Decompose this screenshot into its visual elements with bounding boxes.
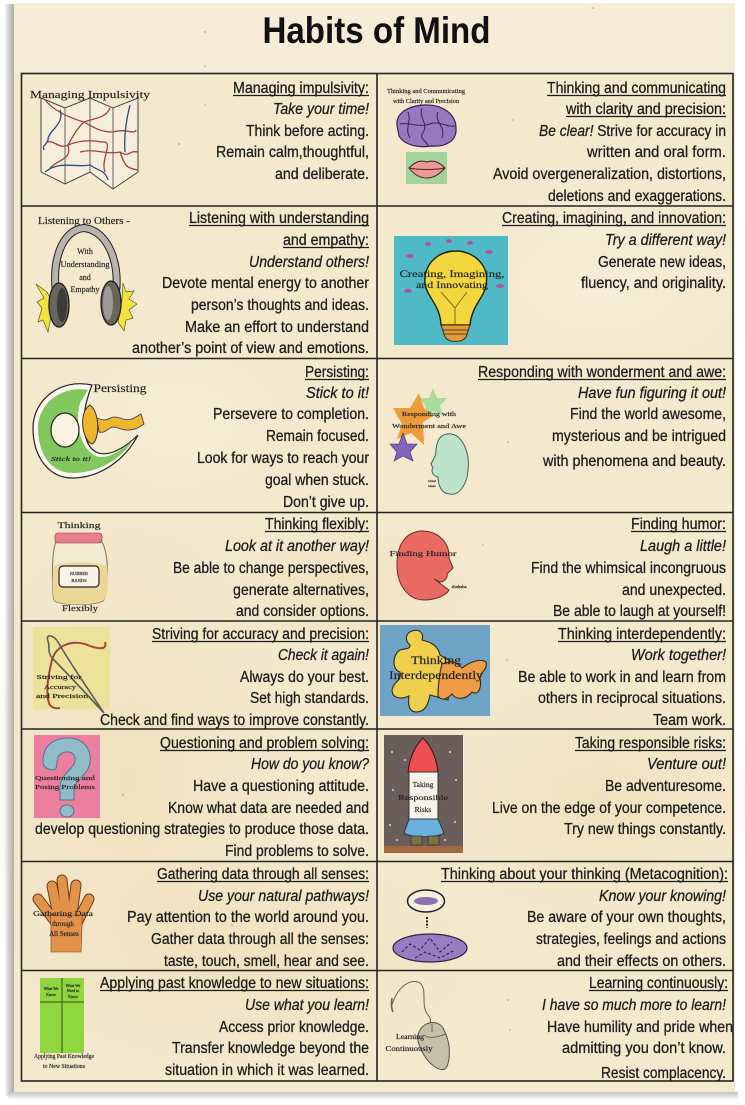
panel: questioning and problem solving bbox=[34, 735, 369, 860]
panel: learning continuously bbox=[386, 975, 733, 1082]
text block: striving for accuracy: Always do your best. bbox=[240, 669, 369, 686]
panel: gathering data through senses bbox=[33, 866, 369, 970]
panel: thinking interdependently bbox=[380, 625, 726, 729]
icon: rocket: Responsible bbox=[398, 793, 449, 802]
text block: thinking flexibly: Be able to change perspectives, bbox=[173, 560, 369, 577]
text block: thinking flexibly: generate alternatives, bbox=[233, 582, 369, 599]
icon: computer mouse bbox=[386, 981, 449, 1070]
text block: questioning and problem solving: Know what data are needed and bbox=[168, 800, 369, 817]
icon: light bulb: Creating, Imagining, bbox=[400, 270, 504, 280]
text block: learning continuously bbox=[542, 975, 733, 1082]
icon: hand: All Senses bbox=[49, 930, 79, 938]
icon: brain and lips: Thinking and Communicating bbox=[387, 88, 466, 95]
icon: hand bbox=[33, 880, 94, 952]
icon: laughing head: ahahaha bbox=[452, 584, 466, 589]
panel: applying past knowledge bbox=[34, 975, 369, 1079]
panel: striving for accuracy bbox=[33, 626, 369, 729]
icon: tape dispenser bbox=[33, 383, 147, 478]
heading: Finding humor: bbox=[631, 516, 726, 533]
heading: Learning continuously: bbox=[589, 975, 728, 992]
heading bbox=[547, 80, 726, 118]
text block: metacognition: and their effects on others. bbox=[557, 953, 726, 970]
text block: listening with understanding: Understand others! bbox=[249, 254, 369, 271]
icon: green T chart: Know bbox=[68, 994, 78, 999]
text block: learning continuously: admitting you don’t know. bbox=[562, 1040, 726, 1057]
text block: responding with wonderment: with phenomena and beauty. bbox=[542, 453, 726, 470]
text block: gathering data through senses: taste, touch, smell, hear and see. bbox=[164, 953, 369, 970]
icon: headphones: Empathy bbox=[71, 285, 99, 294]
text block: questioning and problem solving: How do you know? bbox=[251, 756, 369, 773]
heading: Thinking and communicating bbox=[547, 80, 726, 97]
icon: hand: through bbox=[52, 920, 74, 928]
icon: stars and face bbox=[390, 388, 468, 494]
text block: persisting: Stick to it! bbox=[306, 385, 369, 402]
text block: taking responsible risks bbox=[492, 735, 727, 838]
text block: applying past knowledge bbox=[100, 975, 369, 1079]
text block: thinking interdependently: Team work. bbox=[653, 712, 726, 729]
text block: listening with understanding: Devote mental energy to another bbox=[162, 275, 370, 292]
icon: stars and face: Wonderment and Awe bbox=[392, 423, 466, 430]
text block: thinking and communicating bbox=[493, 80, 726, 205]
text block: managing impulsivity: Remain calm,thoughtful, bbox=[216, 144, 369, 161]
icon: rocket bbox=[384, 735, 463, 853]
heading: Persisting: bbox=[305, 364, 369, 381]
text block: listening with understanding: another’s point of view and emotions. bbox=[132, 340, 369, 357]
text block: applying past knowledge: Access prior knowledge. bbox=[219, 1019, 369, 1036]
icon: light bulb: and Innovating bbox=[416, 281, 488, 291]
text block: thinking flexibly: Look at it another way! bbox=[225, 538, 369, 555]
icon: brain and lips: with Clarity and Precision bbox=[393, 98, 460, 105]
text block: striving for accuracy: Check it again! bbox=[278, 647, 369, 664]
text block: managing impulsivity: and deliberate. bbox=[275, 166, 369, 183]
heading: Striving for accuracy and precision: bbox=[152, 626, 369, 643]
icon: green T chart bbox=[34, 978, 94, 1070]
text block: managing impulsivity: Take your time! bbox=[273, 101, 369, 118]
icon: green T chart: What We bbox=[44, 986, 59, 991]
icon: needle and thread: and Precision bbox=[36, 694, 88, 700]
heading: Applying past knowledge to new situations: bbox=[100, 975, 369, 992]
text block: thinking and communicating: Be clear! Strive for accuracy in bbox=[539, 123, 726, 140]
text block: persisting: Remain focused. bbox=[266, 428, 369, 445]
icon: rocket: Risks bbox=[415, 805, 431, 814]
text block: questioning and problem solving: Have a questioning attitude. bbox=[193, 778, 369, 795]
icon: laughing head bbox=[390, 531, 466, 600]
icon: headphones: With bbox=[77, 247, 93, 256]
text block: responding with wonderment: mysterious and be intrigued bbox=[552, 428, 726, 445]
icon: rubber band jar: BANDS bbox=[71, 578, 87, 583]
icon: question mark: Questioning and bbox=[35, 775, 96, 782]
icon: stars and face: ideas bbox=[428, 484, 436, 488]
text block: finding humor: Laugh a little! bbox=[640, 538, 726, 555]
text block: gathering data through senses bbox=[127, 866, 369, 970]
text block: responding with wonderment: Find the world awesome, bbox=[570, 406, 726, 423]
icon: rubber band jar bbox=[52, 520, 108, 613]
icon: needle and thread: Accuracy bbox=[44, 685, 76, 691]
icon: thought bubble and brain bbox=[393, 890, 467, 962]
icon: puzzle pieces: Interdependently bbox=[389, 670, 483, 682]
panel: managing impulsivity bbox=[30, 80, 369, 189]
text block: listening with understanding bbox=[132, 210, 370, 357]
text block: responding with wonderment: Have fun figuring it out! bbox=[578, 385, 726, 402]
icon: green T chart: to New Situations bbox=[43, 1063, 85, 1070]
icon: headphones bbox=[36, 216, 137, 332]
heading: Gathering data through all senses: bbox=[157, 866, 369, 883]
icon: stars and face: Responding with bbox=[402, 411, 457, 418]
icon: tape dispenser: Stick to it! bbox=[51, 456, 91, 463]
panel: persisting bbox=[33, 364, 370, 511]
text block: persisting: Don’t give up. bbox=[283, 494, 369, 511]
heading: Questioning and problem solving: bbox=[160, 735, 369, 752]
heading: and empathy: bbox=[283, 232, 369, 249]
text block: applying past knowledge: situation in which it was learned. bbox=[165, 1062, 369, 1079]
text block: questioning and problem solving: Find problems to solve. bbox=[225, 843, 369, 860]
icon: green T chart: Need to bbox=[67, 988, 79, 993]
text block: creating, imagining, innovation: Generate new ideas, bbox=[598, 254, 726, 271]
text block: learning continuously: Resist complacency. bbox=[601, 1065, 726, 1082]
icon: stars and face: Great bbox=[428, 479, 436, 483]
icon: green T chart: Know bbox=[46, 992, 56, 997]
icon: rubber band jar: Thinking bbox=[58, 520, 102, 530]
text block: questioning and problem solving bbox=[35, 735, 369, 860]
text block: taking responsible risks: Venture out! bbox=[647, 756, 727, 773]
text block: creating, imagining, innovation: Try a different way! bbox=[605, 232, 726, 249]
panel: responding with wonderment bbox=[390, 364, 726, 494]
text block: listening with understanding: Make an effort to understand bbox=[185, 319, 369, 336]
heading bbox=[189, 210, 369, 249]
icon: green T chart: What We bbox=[66, 983, 81, 988]
heading: Thinking interdependently: bbox=[558, 626, 726, 643]
text block: managing impulsivity bbox=[216, 80, 369, 183]
text block: thinking flexibly bbox=[173, 516, 369, 620]
text block: finding humor: and unexpected. bbox=[622, 582, 726, 599]
text block: thinking interdependently bbox=[518, 626, 726, 729]
icon: question mark: Posing Problems bbox=[35, 784, 96, 791]
icon: puzzle pieces bbox=[380, 625, 490, 716]
text block: managing impulsivity: Think before acting. bbox=[246, 123, 369, 140]
icon: rubber band jar: RUBBER bbox=[70, 571, 88, 576]
text block: striving for accuracy: Check and find ways to improve constantly. bbox=[100, 712, 369, 729]
heading: Thinking flexibly: bbox=[265, 516, 369, 533]
icon: folded map bbox=[30, 90, 151, 189]
icon: tape dispenser: Persisting bbox=[94, 383, 147, 395]
text block: finding humor bbox=[531, 516, 726, 620]
icon: rocket: Taking bbox=[413, 780, 434, 789]
icon: headphones: Understanding bbox=[60, 260, 110, 269]
panel: metacognition bbox=[393, 866, 728, 970]
panel: taking responsible risks bbox=[384, 735, 727, 853]
text block: persisting bbox=[197, 364, 370, 511]
text block: gathering data through senses: Pay attention to the world around you. bbox=[127, 909, 369, 926]
text block: thinking and communicating: written and oral form. bbox=[586, 144, 726, 161]
text block: taking responsible risks: Try new things constantly. bbox=[564, 821, 726, 838]
text block: persisting: goal when stuck. bbox=[265, 472, 369, 489]
icon: headphones: Listening to Others - bbox=[38, 216, 130, 227]
icon: needle and thread bbox=[33, 627, 110, 713]
icon: brain and lips bbox=[387, 88, 466, 184]
text block: listening with understanding: person’s thoughts and ideas. bbox=[191, 297, 369, 314]
icon: puzzle pieces: Thinking bbox=[411, 655, 461, 667]
icon: rubber band jar: Flexibly bbox=[62, 604, 98, 613]
text block: thinking flexibly: and consider options. bbox=[236, 603, 369, 620]
icon: light bulb bbox=[394, 236, 508, 345]
icon: needle and thread: Striving for bbox=[36, 674, 82, 681]
text block: applying past knowledge: Transfer knowledge beyond the bbox=[172, 1040, 369, 1057]
text block: questioning and problem solving: develop questioning strategies to produce those data. bbox=[35, 821, 369, 838]
text block: responding with wonderment bbox=[478, 364, 726, 470]
heading: Taking responsible risks: bbox=[575, 735, 726, 752]
panel: thinking flexibly bbox=[52, 516, 369, 620]
panel: creating, imagining, innovation bbox=[394, 210, 726, 345]
heading: with clarity and precision: bbox=[565, 101, 726, 118]
text block: metacognition bbox=[441, 866, 728, 970]
icon: folded map: Managing Impulsivity bbox=[30, 90, 151, 101]
icon: computer mouse: Learning bbox=[396, 1033, 425, 1041]
text block: persisting: Look for ways to reach your bbox=[197, 450, 370, 467]
icon: green T chart: Applying Past Knowledge bbox=[34, 1053, 94, 1060]
text block: metacognition: Know your knowing! bbox=[599, 888, 726, 905]
heading: Listening with understanding bbox=[189, 210, 369, 227]
text block: thinking interdependently: others in reciprocal situations. bbox=[538, 690, 726, 707]
text block: persisting: Persevere to completion. bbox=[213, 406, 369, 423]
text block: gathering data through senses: Use your natural pathways! bbox=[198, 888, 369, 905]
icon: hand: Gathering Data bbox=[33, 910, 94, 918]
text block: creating, imagining, innovation bbox=[502, 210, 726, 292]
heading: Managing impulsivity: bbox=[233, 80, 369, 97]
title: Habits of Mind bbox=[262, 10, 490, 51]
icon: question mark bbox=[34, 735, 100, 818]
icon: computer mouse: Continuously bbox=[386, 1045, 433, 1053]
icon: laughing head: Finding Humor bbox=[390, 549, 457, 558]
text block: striving for accuracy: Set high standards. bbox=[250, 690, 369, 707]
panel: listening with understanding bbox=[36, 210, 370, 357]
panel: thinking and communicating bbox=[387, 80, 726, 205]
text block: applying past knowledge: Use what you learn! bbox=[245, 997, 369, 1014]
text block: thinking interdependently: Work together! bbox=[631, 647, 726, 664]
text block: creating, imagining, innovation: fluency, and originality. bbox=[581, 275, 726, 292]
text block: taking responsible risks: Be adventuresome. bbox=[605, 778, 726, 795]
text block: gathering data through senses: Gather data through all the senses: bbox=[151, 931, 369, 948]
panel: finding humor bbox=[390, 516, 726, 620]
text block: striving for accuracy bbox=[100, 626, 369, 729]
icon: headphones: and bbox=[79, 273, 91, 282]
